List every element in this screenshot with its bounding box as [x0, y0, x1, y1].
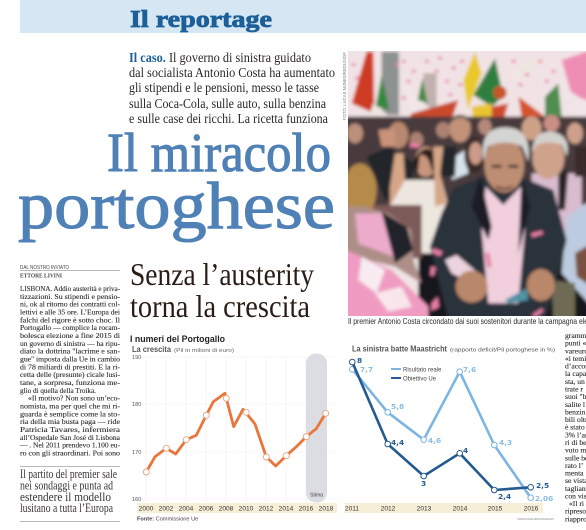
deck text: e sulle case dei ricchi. La ricetta funziona: [129, 112, 329, 127]
year axis: 2012: [259, 506, 274, 512]
pull quote: [20, 466, 120, 522]
year axis: 2016: [524, 506, 539, 512]
subheadline: [130, 256, 314, 324]
y axis labels: 160: [132, 497, 141, 503]
article text left column: lettivi e alle 35 ore. L’Europa dei: [20, 308, 120, 317]
article text right column: «i temi: [565, 354, 586, 363]
year axis: 2011: [345, 506, 359, 512]
right arm sleeve: [562, 200, 586, 307]
main headline: portoghese: [18, 169, 335, 243]
deck text: dal socialista Antonio Costa ha aumentato: [129, 66, 335, 81]
article text left column: nomista, ma per quel che mi ri-: [20, 402, 120, 411]
article text left column: [19, 284, 121, 458]
data markers: [143, 395, 329, 475]
photo: Antonio Costa among supporters: [348, 51, 586, 316]
photo credit: FOTO: LUCAS NUNES/REDUX/GF: [342, 52, 347, 120]
article text left column: di 78 miliardi di prestiti. E la ri-: [20, 362, 120, 371]
article text left column: all’Ospedale San José di Lisbona: [20, 433, 121, 442]
man right: [532, 173, 582, 233]
year axis: 2000: [139, 506, 154, 512]
estimate band: [306, 354, 327, 502]
article text right column: trate r: [565, 384, 583, 394]
GDP line: [146, 393, 326, 472]
article text right column: ripreso: [565, 507, 586, 516]
value labels target: 3: [421, 479, 426, 488]
header band: [20, 0, 586, 33]
article text left column: ni, ok al ritorno dei contratti col-: [20, 300, 120, 309]
value labels real: 5,8: [391, 402, 404, 411]
year axis: 2008: [219, 506, 234, 512]
article text left column: tizzazioni. Su stipendi e pensio-: [20, 292, 120, 301]
value labels real: 4,6: [428, 436, 441, 445]
value labels real: 7,6: [463, 365, 476, 374]
legend: Obiettivo Ue: [403, 376, 437, 382]
main figure suit: [430, 175, 567, 320]
year axis: 2014: [453, 506, 468, 512]
year axis: 2006: [199, 506, 214, 512]
year axis: 2002: [159, 506, 174, 512]
article text left column: LISBONA. Addio austerità e priva-: [20, 284, 120, 293]
deck text: gli stipendi e le pensioni, messo le tasse: [129, 81, 319, 96]
section heading: numbers: I numeri del Portogallo: [130, 334, 225, 345]
chart title: (rapporto deficit/Pil portoghese in %): [450, 348, 555, 354]
article text right column: vuto m: [565, 446, 586, 455]
pull quote: estendere il modello: [20, 490, 111, 504]
article text left column: Patricia Tavares, infermiera: [20, 425, 121, 434]
main headline: Il miracolo: [107, 122, 331, 183]
value labels target: 4,4: [391, 438, 404, 447]
section title: Il reportage: [130, 7, 272, 33]
year axis: 2004: [179, 506, 194, 512]
deck text: [129, 51, 335, 127]
confetti: [352, 57, 556, 99]
byline: DAL NOSTRO INVIATO: [20, 265, 70, 271]
article text left column: ro con gli straordinari. Poi sono: [20, 449, 120, 458]
article text right column: punti «: [565, 339, 586, 348]
byline: [20, 265, 120, 280]
article text left column: guarda è semplice come la sto-: [20, 409, 121, 418]
article text left column: un governo di sinistra — ha ripu-: [20, 339, 120, 348]
legend: [391, 368, 442, 382]
line chart: deficit: [345, 344, 555, 513]
year axis: 2018: [319, 506, 334, 512]
year axis: 2013: [417, 506, 432, 512]
y axis labels: 190: [132, 355, 141, 361]
pull quote: lusitano a tutta l’Europa: [20, 501, 113, 515]
main headline: [18, 122, 335, 243]
article text right column: è stato: [565, 423, 585, 432]
value labels target: 8: [357, 356, 362, 365]
left woman pink: [335, 205, 422, 258]
value labels target: 2,4: [498, 492, 511, 501]
article text right column: taglian: [565, 484, 586, 493]
deck text: sulla Coca-Cola, sulle auto, sulla benzina: [129, 97, 327, 112]
year axis: [345, 503, 543, 513]
chart title: [132, 344, 234, 354]
article text right column: menta: [565, 468, 584, 478]
article text left column: diato la dottrina "lacrime e san-: [20, 347, 120, 356]
y axis labels: [132, 355, 141, 503]
graphic credit: CAMPAGNA/ELABORAZIONE/DATI: [517, 517, 554, 521]
article text right column: suoi "b: [565, 392, 586, 401]
value labels target: 2,5: [536, 481, 549, 490]
article text right column: ri di be: [565, 438, 586, 447]
value labels real: 7,7: [360, 365, 373, 374]
article text left column: «Il motivo? Non sono un’eco-: [28, 394, 120, 403]
subheadline: torna la crescita: [130, 288, 310, 324]
subheadline: Senza l’austerity: [130, 256, 314, 292]
deck text: Il caso. Il governo di sinistra guidato: [129, 51, 311, 66]
falling confetti: [410, 143, 544, 317]
article text left column: glio di quella della Troika.: [20, 386, 96, 395]
chart title: La crescita: [132, 344, 171, 354]
article text left column: — . Nel 2011 prendevo 1.100 eu-: [19, 441, 120, 450]
value labels real: 4,3: [499, 438, 512, 447]
year axis: 2014: [279, 506, 294, 512]
background faces: [449, 114, 471, 142]
head of Costa: [484, 138, 524, 192]
arms and hands: [445, 255, 478, 283]
article text left column: bolesca elezione a fine 2015 di: [20, 331, 120, 340]
article text right column: [565, 331, 586, 523]
byline: ETTORE LIVINI: [20, 272, 62, 280]
estimate band: Stima: [310, 492, 323, 498]
chart title: (Pil in milioni di euro): [174, 348, 234, 354]
value labels target: 4: [463, 446, 468, 455]
article text right column: benzin: [565, 407, 585, 416]
value labels real: [360, 365, 553, 503]
target line: [350, 359, 534, 493]
chart title: [352, 344, 555, 354]
source note: Fonte: Commissione Ue: [137, 516, 198, 522]
y axis labels: 180: [132, 402, 141, 408]
year axis: 2012: [381, 506, 396, 512]
value labels real: 2,06: [535, 494, 553, 503]
article text right column: «Il ri: [569, 499, 584, 508]
article text right column: sta, un: [565, 377, 585, 386]
legend: Risultato reale: [403, 368, 442, 374]
real result line: [350, 366, 534, 501]
article text right column: salite l: [565, 400, 585, 409]
article text left column: Portogallo — complice la rocam-: [20, 323, 120, 332]
article text left column: gue" imposta dalla Ue in cambio: [20, 355, 120, 364]
woman in white: [388, 176, 450, 208]
year axis: 2015: [488, 506, 503, 512]
dark lower crowd: [418, 253, 586, 327]
article text left column: tane, a sorpresa, funziona me-: [20, 378, 121, 387]
year axis: [137, 503, 337, 513]
article text right column: la capa: [565, 369, 586, 378]
line chart: growth: [132, 344, 337, 513]
year axis: 2010: [239, 506, 254, 512]
y axis labels: 170: [132, 450, 141, 456]
value labels target: [357, 356, 549, 501]
article text left column: cetta delle (presunte) cicale lusi-: [20, 370, 120, 379]
year axis: 2016: [299, 506, 314, 512]
pull quote: Il partito del premier sale: [20, 467, 117, 481]
article text right column: rato l’: [565, 461, 583, 470]
article text left column: ria della mia busta paga — ride: [20, 417, 121, 426]
pull quote: nei sondaggi e punta ad: [20, 478, 113, 492]
article text left column: falchi del rigore è sotto choc. Il: [20, 315, 120, 324]
chart title: La sinistra batte Maastricht: [352, 344, 447, 354]
